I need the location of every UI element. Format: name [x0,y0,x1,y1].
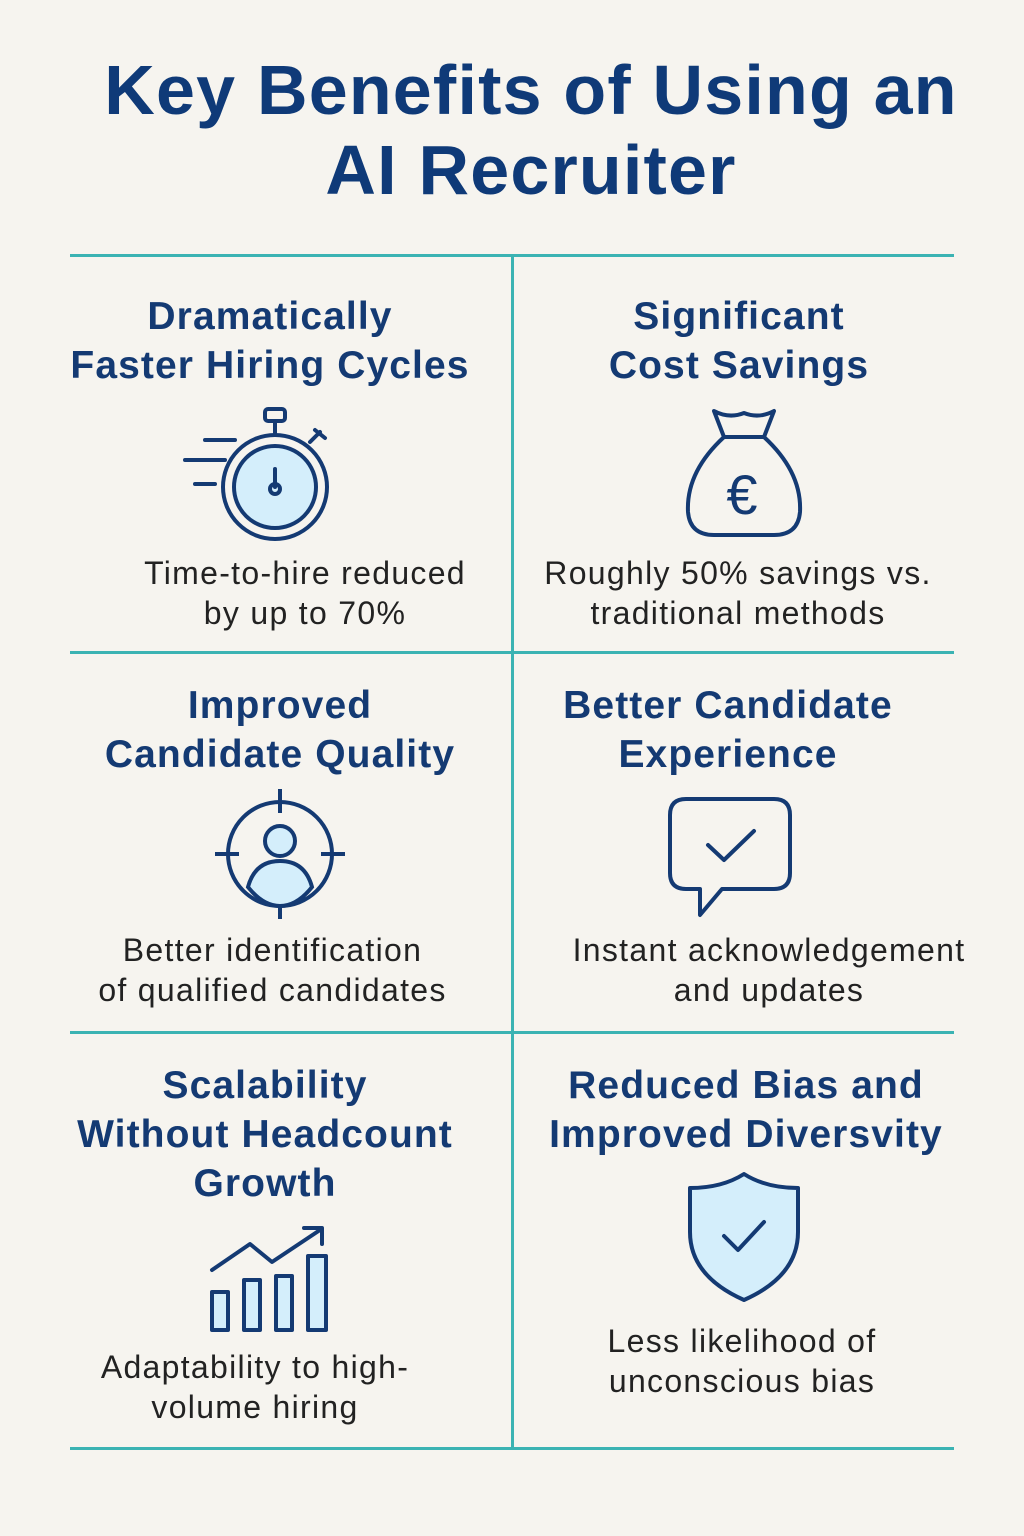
icon: shield check [688,1172,800,1302]
heading: scalability [77,1064,453,1205]
heading: candidate quality: Candidate Quality [105,733,455,776]
text: savings: Roughly 50% savings vs. [544,555,932,591]
panel: scalability [77,1064,453,1425]
icon: bar chart growth [210,1226,328,1332]
heading: candidate experience [563,684,893,776]
text: time-to-hire: Time-to-hire reduced [144,555,466,591]
heading: reduced bias [549,1064,943,1156]
heading: cost savings: Cost Savings [609,344,869,387]
text: savings: traditional methods [590,595,886,631]
heading: reduced bias: Improved Diversvity [549,1113,943,1156]
heading: faster hiring [70,295,470,387]
heading: scalability: Scalability [162,1064,368,1107]
title: Key Benefits of Using an [104,51,958,129]
heading: candidate quality: Improved [188,684,372,727]
title: AI Recruiter [325,131,737,209]
heading: scalability: Growth [193,1162,337,1205]
text: instant acknowledgement: Instant acknowledgement [573,932,965,968]
icon: money bag [686,408,802,537]
panel: reduced bias [549,1064,943,1399]
title [104,51,958,209]
text: identification: Better identification [123,932,422,968]
text: time-to-hire: by up to 70% [204,595,406,631]
text: less likelihood: unconscious bias [609,1363,875,1399]
heading: scalability: Without Headcount [77,1113,453,1156]
heading: cost savings: Significant [633,295,845,338]
heading: faster hiring: Faster Hiring Cycles [70,344,470,387]
text: adaptability: Adaptability to high- [101,1349,409,1385]
icon: money bag: € [726,463,758,526]
text: instant acknowledgement: and updates [674,972,864,1008]
heading: candidate quality [105,684,455,776]
text: adaptability: volume hiring [151,1389,359,1425]
panel: faster hiring [70,295,470,631]
heading: candidate experience: Experience [618,733,838,776]
text: less likelihood: Less likelihood of [608,1323,876,1359]
heading: reduced bias: Reduced Bias and [568,1064,924,1107]
heading: cost savings [609,295,869,387]
text: identification: of qualified candidates [98,972,447,1008]
panel: candidate quality [98,684,455,1008]
text: adaptability [101,1349,409,1425]
panel: candidate experience [563,684,965,1008]
icon: target person [215,789,345,919]
icon: stopwatch [183,407,329,541]
heading: candidate experience: Better Candidate [563,684,893,727]
text: time-to-hire [144,555,466,631]
heading: faster hiring: Dramatically [147,295,393,338]
text: instant acknowledgement [573,932,965,1008]
icon: speech bubble check [668,797,792,918]
panel: cost savings [544,295,932,631]
text: identification [98,932,447,1008]
text: less likelihood [608,1323,876,1399]
text: savings [544,555,932,631]
